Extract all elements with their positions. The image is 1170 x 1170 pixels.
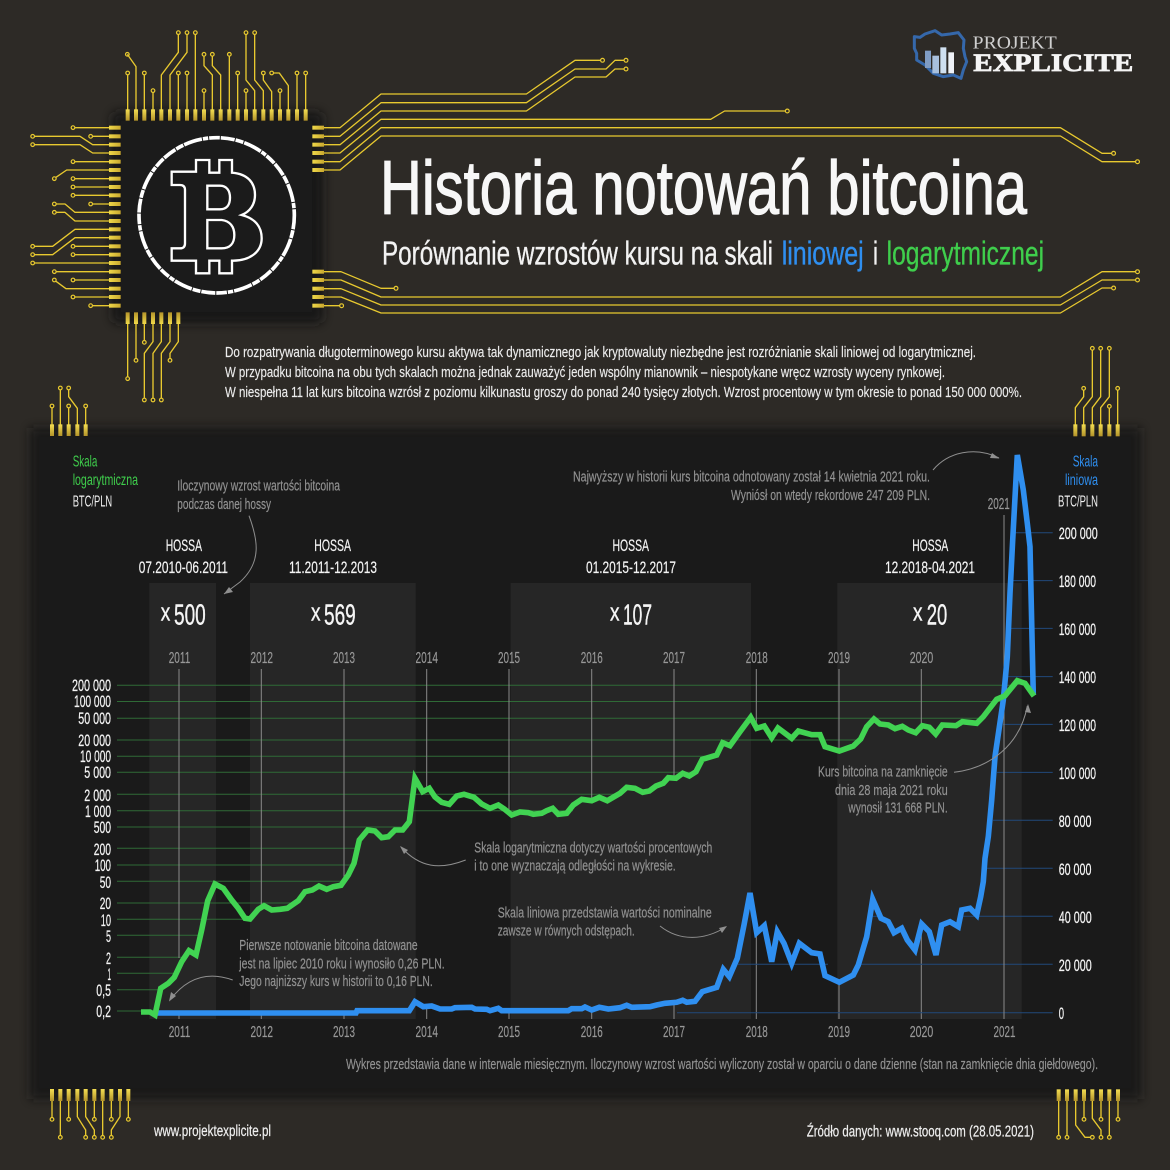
callout: closing price: Kurs bitcoina na zamknięcie <box>818 764 948 781</box>
bull market labels: HOSSA <box>166 536 202 555</box>
log axis labels: 200 000 <box>72 676 111 695</box>
icon: panel corner pins bottom right <box>1057 1089 1120 1139</box>
linear axis labels: 60 000 <box>1059 860 1091 879</box>
callout: closing price: dnia 28 maja 2021 roku <box>835 782 948 799</box>
icon: processor chip with circuit traces <box>31 31 324 402</box>
log axis labels: 5 000 <box>84 763 111 782</box>
top year labels: 2012 <box>251 650 273 667</box>
log axis labels: 10 000 <box>80 747 111 766</box>
bull market labels: 01.2015-12.2017 <box>586 558 676 577</box>
bottom year labels: 2016 <box>581 1024 603 1041</box>
subtitle: i <box>873 234 878 271</box>
log axis labels: 1 000 <box>85 802 111 821</box>
bitcoin symbol <box>172 160 262 273</box>
callout: first quote: jest na lipiec 2010 roku i wynosiło 0,26 PLN. <box>239 955 445 972</box>
log axis labels: 20 000 <box>78 731 111 750</box>
callout: all time high: Najwyższy w historii kurs bitcoina odnotowany został 14 kwietnia 2021 roku. <box>573 469 930 486</box>
logo: Projekt Explicite <box>914 31 1133 78</box>
bottom year labels: 2019 <box>828 1024 850 1041</box>
bull market labels: 12.2018-04.2021 <box>885 558 975 577</box>
callout: linear scale note: zawsze w równych odstępach. <box>498 923 635 940</box>
panel shadow <box>30 428 1141 1099</box>
log axis labels: 0,5 <box>96 981 111 1000</box>
icon: panel corner pins top left <box>50 386 88 436</box>
linear scale tick lines <box>677 533 1053 1013</box>
top year labels <box>169 496 1010 667</box>
arrow: multiplier explanation <box>224 516 256 594</box>
multipliers: 107 <box>623 599 652 631</box>
right scale label <box>1058 454 1098 511</box>
bottom year labels: 2011 <box>169 1024 190 1041</box>
bull market labels: 11.2011-12.2013 <box>289 558 377 577</box>
top year labels: 2021 <box>988 496 1010 513</box>
arrow: linear scale note <box>660 926 727 937</box>
log axis labels: 500 <box>94 818 111 837</box>
arrow: first quote <box>169 976 233 1002</box>
left scale label: BTC/PLN <box>73 494 112 511</box>
linear axis labels: 100 000 <box>1059 764 1096 783</box>
panel: chart: 1 <box>108 965 111 984</box>
callout: log scale note: Skala logarytmiczna dotyczy wartości procentowych <box>474 839 712 856</box>
log axis labels: 200 <box>94 840 111 859</box>
green line: logarithmic scale <box>141 681 1034 1015</box>
bottom year labels <box>169 1024 1016 1041</box>
linear axis labels: 180 000 <box>1059 572 1096 591</box>
linear axis labels: 160 000 <box>1059 620 1096 639</box>
log axis labels <box>72 676 111 1021</box>
footer: data source: Źródło danych: www.stooq.com (28.05.2021) <box>807 1124 1034 1140</box>
top year labels: 2016 <box>581 650 603 667</box>
top year labels: 2011 <box>169 650 190 667</box>
bottom traces <box>126 312 180 402</box>
log axis labels: 50 000 <box>78 709 111 728</box>
top year labels: 2020 <box>910 650 933 667</box>
icon: panel corner pins bottom left <box>50 1089 130 1139</box>
callout: first quote: Jego najniższy kurs w historii to 0,16 PLN. <box>239 973 433 990</box>
linear axis labels: 200 000 <box>1059 524 1098 543</box>
bottom year labels: 2018 <box>746 1024 768 1041</box>
logo map mark <box>914 31 967 78</box>
top year labels: 2013 <box>333 650 355 667</box>
icon: panel corner pins top right <box>1073 346 1120 436</box>
log axis labels: 10 <box>101 911 111 930</box>
log axis labels: 100 <box>95 856 111 875</box>
top year labels: 2015 <box>498 650 520 667</box>
chip shadow <box>112 112 323 323</box>
bull market labels: HOSSA <box>314 536 351 555</box>
log axis labels: 2 000 <box>84 786 111 805</box>
right pins <box>312 126 324 308</box>
callout: log scale note <box>474 839 712 875</box>
arrow: log scale note <box>400 846 466 866</box>
bull market labels: HOSSA <box>612 536 649 555</box>
multipliers: x <box>161 600 170 626</box>
linear axis labels: 120 000 <box>1059 716 1096 735</box>
subtitle: logarytmicznej <box>887 234 1044 271</box>
log scale grid lines <box>117 685 1017 1011</box>
linear axis labels: 0 <box>1059 1004 1064 1023</box>
bottom year labels: 2020 <box>910 1024 933 1041</box>
year guide lines <box>179 669 921 1019</box>
bottom year labels: 2014 <box>415 1024 438 1041</box>
multipliers: 569 <box>324 599 356 631</box>
linear axis labels: 20 000 <box>1059 956 1092 975</box>
top year labels: 2014 <box>415 650 438 667</box>
linear axis labels: 80 000 <box>1059 812 1091 831</box>
bottom year labels: 2012 <box>251 1024 273 1041</box>
linear axis labels <box>1059 524 1098 1023</box>
log axis labels: 0,2 <box>96 1002 111 1021</box>
left traces <box>31 126 121 308</box>
right scale label: BTC/PLN <box>1058 494 1098 511</box>
left scale label <box>73 454 138 511</box>
top year labels: 2018 <box>746 650 768 667</box>
intro paragraph: W przypadku bitcoina na obu tych skalach można jednak zauważyć jeden wspólny mianownik – niespotykane wręcz wzrosty wyceny rynkowej. <box>225 365 945 381</box>
bull market labels: 07.2010-06.2011 <box>139 558 228 577</box>
bottom year labels: 2017 <box>663 1024 685 1041</box>
subtitle: liniowej <box>782 234 864 271</box>
callout: first quote: Pierwsze notowanie bitcoina datowane <box>239 937 418 954</box>
callout: closing price: wynosił 131 668 PLN. <box>848 800 948 817</box>
log axis labels: 50 <box>100 873 111 892</box>
multipliers: 20 <box>927 599 947 631</box>
callout: first quote <box>239 937 445 990</box>
bull market bands <box>149 583 1022 1019</box>
subtitle: Porównanie wzrostów kursu na skali <box>382 234 773 271</box>
bottom year labels: 2015 <box>498 1024 520 1041</box>
right scale label: Skala <box>1073 454 1098 471</box>
panel: chart <box>40 437 1131 1088</box>
callout: multiplier explanation <box>177 478 340 513</box>
callout: all time high: Wyniósł on wtedy rekordowe 247 209 PLN. <box>731 487 930 504</box>
intro paragraph <box>225 345 1022 401</box>
arrow: all time high <box>933 452 1000 470</box>
top year labels: 2019 <box>828 650 850 667</box>
blue line: linear scale <box>155 455 1033 1013</box>
logo text: PROJEKT <box>973 32 1057 52</box>
intro paragraph: Do rozpatrywania długoterminowego kursu aktywa tak dynamicznego jak kryptowaluty niezbędne jest rozróżnianie skali liniowej od logarytmicznej. <box>225 345 976 361</box>
left scale label: Skala <box>73 454 97 471</box>
callout: closing price <box>818 764 948 817</box>
bull market labels <box>139 536 975 577</box>
arrow: closing price <box>954 704 1031 772</box>
callout: linear scale note: Skala liniowa przedstawia wartości nominalne <box>498 904 712 921</box>
footer: website: www.projektexplicite.pl <box>153 1123 271 1140</box>
callout: multiplier explanation: podczas danej hossy <box>177 496 271 513</box>
log axis labels: 100 000 <box>74 692 111 711</box>
multipliers: 500 <box>174 599 206 631</box>
callout: all time high <box>573 469 930 504</box>
linear axis labels: 40 000 <box>1059 908 1092 927</box>
top traces <box>125 31 308 121</box>
bull market labels: HOSSA <box>912 536 949 555</box>
year 2021 guide line <box>1003 515 1005 1019</box>
right circuit traces <box>324 58 1139 313</box>
chip body <box>121 121 312 312</box>
bottom year labels: 2021 <box>994 1024 1016 1041</box>
multipliers: x <box>913 600 922 626</box>
callout: log scale note: i to one wyznaczają odległości na wykresie. <box>474 858 676 875</box>
icon: bitcoin logo <box>139 138 294 293</box>
log axis labels: 2 <box>106 949 111 968</box>
multipliers: x <box>610 600 620 626</box>
logo: Projekt Explicite: EXPLICITE <box>973 50 1133 77</box>
top year labels: 2017 <box>663 650 685 667</box>
dashed coin ring <box>139 138 294 293</box>
bottom year labels: 2013 <box>333 1024 355 1041</box>
multipliers <box>161 599 947 631</box>
callout: multiplier explanation: Iloczynowy wzrost wartości bitcoina <box>177 478 340 495</box>
left scale label: logarytmiczna <box>73 472 138 489</box>
log axis labels: 20 <box>100 894 111 913</box>
multipliers: x <box>311 600 320 626</box>
linear axis labels: 140 000 <box>1059 668 1096 687</box>
callout: linear scale note <box>498 904 712 940</box>
log axis labels: 5 <box>106 927 111 946</box>
right scale label: liniowa <box>1065 472 1098 489</box>
